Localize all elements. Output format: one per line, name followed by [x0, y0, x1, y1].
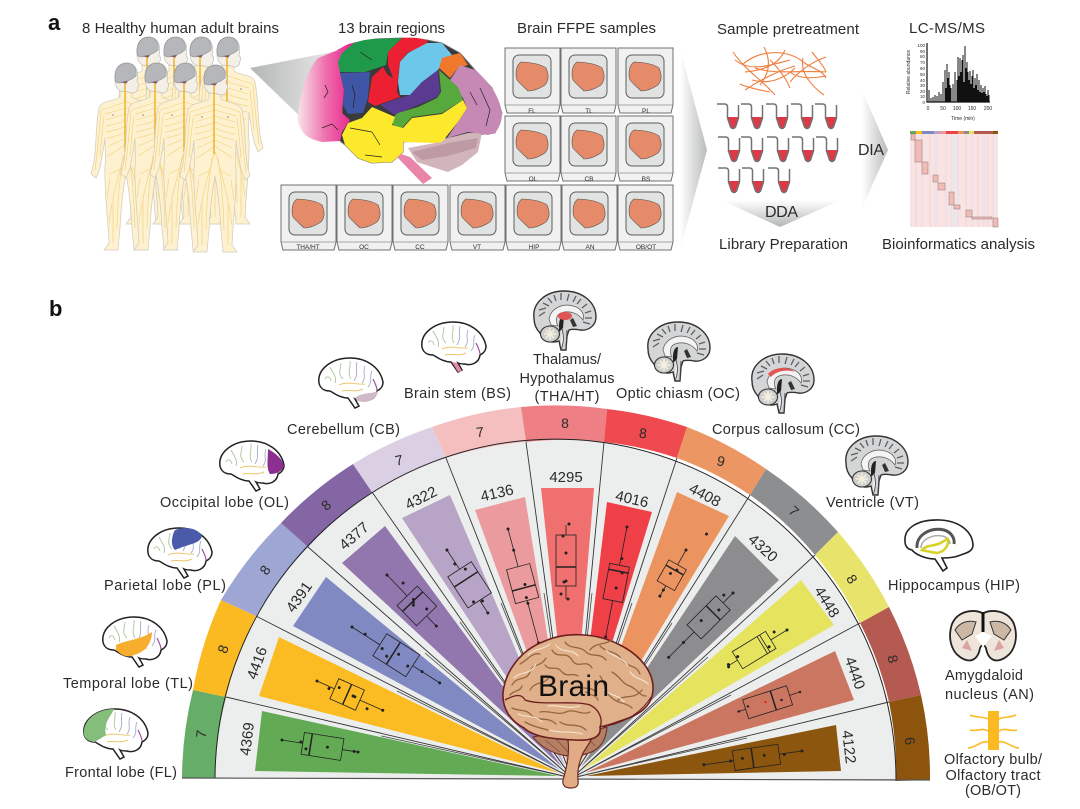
chart: LC-MS/MS chromatogram: 100 — [953, 106, 961, 112]
FFPE cassettes: OB/OT — [636, 244, 656, 251]
chart: LC-MS/MS chromatogram: 10 — [920, 94, 925, 99]
FFPE cassettes: AN — [585, 244, 595, 251]
protein counts: 4322 — [402, 483, 440, 514]
outer bands — [182, 405, 930, 781]
FFPE cassettes: HIP — [529, 244, 539, 251]
sample counts: 6 — [902, 736, 918, 746]
zoom cone to brain — [250, 50, 342, 128]
wedge TL — [259, 637, 559, 773]
protein counts: 4320 — [745, 531, 781, 566]
boxplot THA — [556, 522, 576, 600]
chart: LC-MS/MS chromatogram: 150 — [968, 106, 976, 112]
label and icon: AN: Amygdaloid — [945, 668, 1023, 684]
wedge HIP — [583, 580, 834, 770]
label and icon: OB/OT: Olfactory tract — [946, 768, 1040, 784]
chart: LC-MS/MS chromatogram — [906, 43, 992, 122]
protein counts: 4016 — [614, 487, 650, 512]
FFPE cassettes: PL — [642, 108, 650, 115]
FFPE cassettes: CB — [584, 176, 594, 183]
wedge VT — [581, 536, 779, 767]
label and icon: FL — [65, 709, 177, 781]
boxplot PL — [344, 615, 448, 695]
fan background — [215, 439, 896, 781]
label and icon: CC — [712, 354, 860, 438]
boxplot VT — [661, 585, 741, 665]
FFPE cassettes: CC — [415, 244, 425, 251]
sample tubes — [717, 104, 838, 192]
chart: heatmap — [910, 131, 998, 227]
label and icon: PL: Parietal lobe (PL) — [104, 578, 226, 594]
box plots — [279, 522, 805, 775]
sample counts: 8 — [843, 571, 861, 587]
protein counts: 4416 — [244, 645, 271, 682]
band CC — [677, 427, 766, 495]
wedge OC — [575, 502, 652, 764]
chart: LC-MS/MS chromatogram: 80 — [920, 54, 925, 59]
wedge THA — [541, 488, 594, 764]
wedges — [255, 488, 854, 776]
band CB — [353, 427, 446, 492]
label and icon: TL — [63, 617, 193, 692]
arrow: DIA — [862, 90, 888, 208]
heading: bioinformatics: Bioinformatics analysis — [882, 236, 1035, 253]
label and icon: OB/OT — [944, 711, 1043, 799]
boxplot AN — [734, 682, 804, 721]
wedge BS — [475, 497, 568, 764]
band HIP — [815, 532, 889, 623]
panel a: workflow — [48, 10, 1035, 253]
wedge FL — [255, 711, 558, 776]
label and icon: VT — [826, 436, 919, 511]
chart: LC-MS/MS chromatogram: 40 — [920, 78, 925, 83]
chart: LC-MS/MS chromatogram: 200 — [984, 106, 992, 112]
chart: LC-MS/MS chromatogram: 50 — [940, 106, 946, 112]
label and icon: FL: Frontal lobe (FL) — [65, 765, 177, 781]
protein counts: 4408 — [686, 480, 723, 511]
band TL — [193, 600, 256, 697]
DDA triangle — [721, 200, 841, 227]
sample counts: 8 — [884, 653, 902, 665]
FFPE cassettes: TL — [585, 108, 593, 115]
protein counts: 4122 — [838, 729, 859, 765]
boxplot HIP — [722, 621, 793, 675]
label and icon: OL: Occipital lobe (OL) — [160, 495, 289, 511]
band OB — [889, 695, 930, 781]
FFPE cassettes: THA/HT — [296, 244, 320, 251]
band FL — [182, 690, 226, 778]
chart: LC-MS/MS chromatogram: 0 — [922, 100, 925, 105]
FFPE cassettes — [281, 48, 673, 251]
FFPE cassettes: OC — [359, 244, 369, 251]
label and icon: THA/HT: (THA/HT) — [534, 389, 600, 405]
label and icon: AN: nucleus (AN) — [945, 687, 1034, 703]
chart: LC-MS/MS chromatogram: Relative abundance — [906, 50, 912, 94]
sample counts: 7 — [394, 451, 405, 469]
sample counts: 8 — [256, 562, 274, 578]
label and icon: PL — [104, 528, 226, 594]
wedge OB — [586, 725, 841, 776]
label and icon: OL — [160, 441, 289, 511]
band BS — [432, 407, 526, 458]
FFPE cassettes: FL — [528, 108, 536, 115]
chart: LC-MS/MS chromatogram: 30 — [920, 83, 925, 88]
label and icon: OB/OT: (OB/OT) — [965, 783, 1021, 799]
protein counts: 4377 — [336, 519, 372, 554]
label DDA: DDA — [765, 204, 798, 221]
label and icon: VT: Ventricle (VT) — [826, 495, 919, 511]
boxplot FL — [279, 729, 361, 763]
panel label a: a — [48, 10, 61, 35]
wedge CB — [402, 495, 565, 766]
boxplot TL — [311, 670, 389, 721]
chart: LC-MS/MS chromatogram: 90 — [920, 49, 925, 54]
chart: LC-MS/MS chromatogram: 60 — [920, 66, 925, 71]
chart: LC-MS/MS chromatogram: 100 — [917, 43, 925, 48]
sample counts: 8 — [561, 415, 569, 431]
central brain illustration — [503, 635, 653, 788]
label and icon: CC: Corpus callosum (CC) — [712, 422, 860, 438]
wedge AN — [585, 651, 854, 773]
protein counts: 4448 — [811, 584, 843, 621]
FFPE cassettes: OL — [529, 176, 538, 183]
heading: library preparation: Library Preparation — [719, 236, 848, 253]
wedge PL — [293, 577, 560, 770]
label and icon: THA/HT: Thalamus/ — [533, 352, 602, 368]
sample counts: 8 — [638, 425, 648, 441]
label and icon: THA/HT: Hypothalamus — [520, 371, 614, 387]
panel label b: b — [49, 296, 62, 321]
label and icon: THA/HT — [520, 291, 614, 405]
label and icon: BS — [404, 322, 511, 402]
label and icon: CB: Cerebellum (CB) — [287, 422, 400, 438]
sample counts: 8 — [214, 642, 232, 655]
label DIA: DIA — [858, 142, 884, 159]
chart: LC-MS/MS chromatogram: 50 — [920, 72, 925, 77]
FFPE cassettes: VT — [473, 244, 481, 251]
heading: 8 healthy brains: 8 Healthy human adult brains — [82, 20, 279, 37]
label and icon: OC — [616, 322, 740, 402]
central brain illustration: Brain — [538, 670, 609, 703]
FFPE cassettes: BS — [642, 176, 651, 183]
sample counts: 7 — [786, 502, 802, 520]
protein counts: 4136 — [479, 481, 515, 506]
arrow: samples to pretreatment — [680, 48, 707, 250]
heading: LC-MS/MS: LC-MS/MS — [909, 20, 985, 37]
chart: LC-MS/MS chromatogram: 70 — [920, 60, 925, 65]
peptide fibers — [733, 47, 826, 95]
band VT — [750, 469, 838, 555]
protein counts — [237, 469, 868, 765]
band OL — [281, 464, 372, 547]
sample counts — [193, 415, 918, 746]
boxplot CC — [650, 523, 709, 603]
boxplot OC — [596, 524, 637, 640]
heading: FFPE samples: Brain FFPE samples — [517, 20, 656, 37]
heading: pretreatment: Sample pretreatment — [717, 21, 860, 38]
sample counts: 7 — [475, 424, 485, 440]
chart: LC-MS/MS chromatogram: 20 — [920, 89, 925, 94]
label and icon: CB — [287, 358, 400, 438]
heading: 13 regions: 13 brain regions — [338, 20, 445, 37]
label and icon: TL: Temporal lobe (TL) — [63, 676, 193, 692]
label and icon: BS: Brain stem (BS) — [404, 386, 511, 402]
boxplot CB — [434, 541, 500, 622]
chart: LC-MS/MS chromatogram: Time (min) — [951, 116, 975, 122]
chart: LC-MS/MS chromatogram: 0 — [927, 106, 930, 112]
human figures — [91, 37, 263, 252]
boxplot OB — [701, 741, 805, 775]
band AN — [860, 607, 921, 702]
protein counts: 4295 — [549, 469, 583, 486]
label and icon: AN — [945, 611, 1034, 703]
protein counts: 4369 — [237, 721, 258, 757]
label and icon: HIP: Hippocampus (HIP) — [888, 578, 1020, 594]
boxplot BS — [496, 524, 551, 648]
label and icon: HIP — [888, 520, 1020, 594]
sample counts: 8 — [318, 496, 334, 514]
label and icon: OB/OT: Olfactory bulb/ — [944, 752, 1043, 768]
wedge OL — [342, 526, 563, 768]
protein counts: 4391 — [283, 579, 316, 616]
band THA — [521, 405, 607, 442]
wedge CC — [578, 492, 729, 765]
band OC — [604, 409, 687, 458]
label and icon: OC: Optic chiasm (OC) — [616, 386, 740, 402]
colored brain atlas — [298, 38, 502, 184]
protein counts: 4440 — [841, 655, 868, 692]
sample counts: 7 — [193, 729, 209, 739]
panel b: semicircular fan chart — [63, 291, 1043, 799]
band PL — [221, 523, 308, 616]
boxplot OL — [376, 564, 447, 637]
sample counts: 9 — [715, 452, 727, 470]
